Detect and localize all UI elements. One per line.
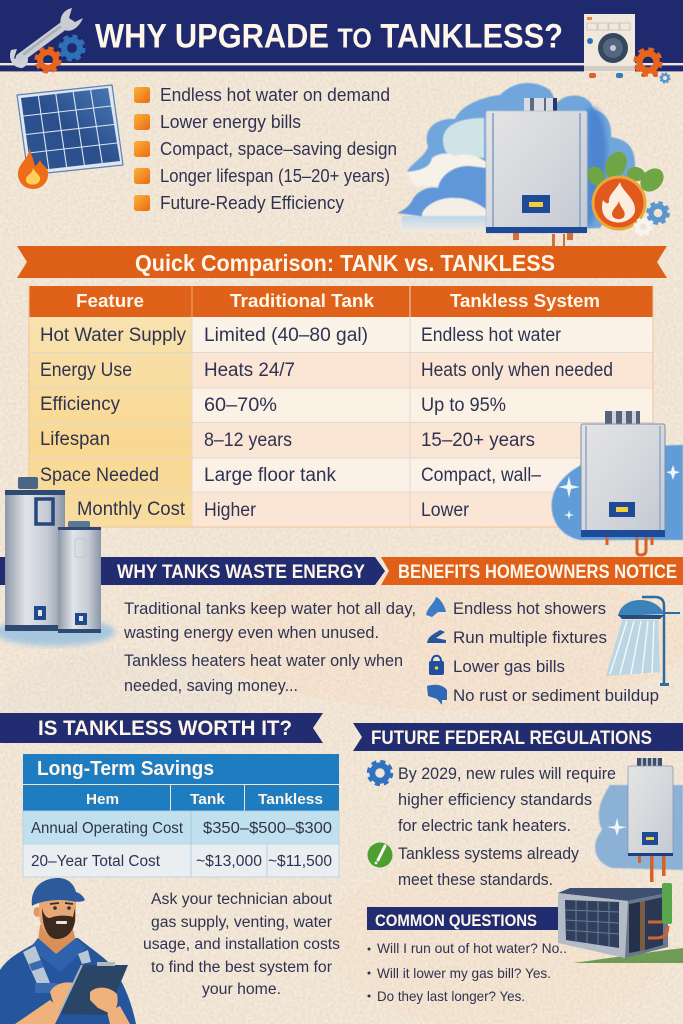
- heater base: [486, 227, 587, 233]
- text block: why tanks waste energy: wasting energy even when unused.: [123, 623, 379, 642]
- copper pipes: [648, 922, 668, 938]
- row: lifespan: 15–20+ years: [421, 430, 535, 451]
- shadow: [0, 618, 115, 646]
- regulation text 1: [398, 765, 616, 835]
- grille: [565, 900, 619, 948]
- row: efficiency: Efficiency: [40, 394, 120, 415]
- savings row: annual operating cost: Annual Operating Cost: [31, 820, 184, 837]
- torso: [0, 938, 136, 1024]
- large tank: [5, 477, 65, 631]
- illustration: traditional tanks: [0, 477, 115, 646]
- bullet 2: Lower energy bills: [160, 111, 301, 132]
- left hand: [50, 982, 76, 1012]
- benefit: fixtures: Run multiple fixtures: [453, 628, 607, 647]
- row: monthly cost: [77, 499, 470, 521]
- heater panel: [522, 195, 550, 213]
- savings table: [23, 754, 339, 877]
- bullet 4: Longer lifespan (15–20+ years): [160, 165, 390, 186]
- ribbon: is tankless worth it: [0, 713, 323, 743]
- row: space needed: Large floor tank: [204, 465, 336, 486]
- bullet 5: Future-Ready Efficiency: [160, 192, 345, 213]
- icon: green check: [368, 842, 392, 868]
- green pipe: [662, 883, 672, 924]
- row: efficiency: [40, 394, 506, 416]
- sparkle: [607, 818, 627, 836]
- regulation text 2: Tankless systems already: [398, 845, 580, 863]
- base: [581, 530, 665, 537]
- cap: [32, 878, 85, 906]
- collar: [30, 938, 86, 972]
- ear: [34, 907, 40, 917]
- control panel: [609, 502, 635, 517]
- regulation text 1: By 2029, new rules will require: [398, 765, 616, 783]
- illustration: tankless heater with clouds and flame badge: [397, 83, 668, 246]
- savings title: [23, 754, 339, 784]
- table header: Tankless System: [450, 290, 600, 311]
- heater edge trim: [493, 113, 580, 227]
- savings row: 20-year total cost: 20–Year Total Cost: [31, 853, 161, 870]
- bullet 3: Compact, space–saving design: [160, 138, 397, 159]
- clipboard: [59, 962, 128, 1015]
- heater body: [486, 111, 587, 233]
- illustration: outdoor condenser unit: [558, 883, 683, 963]
- question 3: Do they last longer? Yes.: [377, 988, 525, 1004]
- bullet 1: Endless hot water on demand: [160, 84, 390, 105]
- bullet list: benefits: [134, 84, 397, 213]
- row: space needed: Space Needed: [40, 465, 159, 486]
- icon: wrench and gears: [10, 8, 84, 72]
- neck: [38, 925, 76, 954]
- savings header row: Tank: [190, 792, 226, 808]
- question 1: Will I run out of hot water? No..: [377, 940, 567, 956]
- text block: why tanks waste energy: Traditional tanks keep water hot all day,: [124, 599, 416, 618]
- right forearm: [107, 1006, 130, 1024]
- banner: common questions: COMMON QUESTIONS: [375, 912, 537, 930]
- savings row: 20-year total cost: ~$11,500: [268, 853, 332, 870]
- row: energy use: [40, 360, 613, 381]
- ground: [573, 948, 683, 963]
- list: common questions: [368, 940, 567, 1004]
- list: benefits homeowners notice: [426, 597, 659, 705]
- flue: [637, 758, 662, 766]
- table header: [29, 286, 653, 317]
- clouds: [397, 83, 635, 232]
- savings row: 20-year total cost: ~$13,000: [196, 853, 262, 870]
- flue: [605, 411, 640, 424]
- ribbon: quick comparison heading: Quick Comparison: TANK vs. TANKLESS: [135, 250, 555, 276]
- pipes: [607, 537, 652, 555]
- text block: why tanks waste energy: [123, 599, 416, 695]
- small gears: [635, 203, 668, 235]
- text block: ask your technician: Ask your technician about: [151, 891, 333, 908]
- row: hot water supply: Endless hot water: [421, 325, 562, 346]
- strap bands: [29, 960, 44, 971]
- row: hot water supply: Limited (40–80 gal): [204, 325, 368, 346]
- small tank: [58, 521, 101, 633]
- side dark panels: [629, 897, 663, 953]
- text block: ask your technician: gas supply, venting, water: [151, 914, 332, 931]
- row: energy use: Heats only when needed: [421, 360, 613, 381]
- sparkles: [558, 465, 680, 520]
- text block: ask your technician: usage, and installation costs: [143, 936, 340, 953]
- row: lifespan: 8–12 years: [204, 430, 292, 451]
- leaves: [584, 148, 668, 196]
- illustration: technician with clipboard: [0, 878, 136, 1024]
- left forearm: [15, 1000, 62, 1024]
- text block: ask your technician: to find the best system for: [151, 959, 332, 976]
- row: energy use: Heats 24/7: [204, 360, 295, 381]
- row: monthly cost: Higher: [204, 500, 257, 521]
- list: regulations: [368, 762, 616, 889]
- benefit: no rust: No rust or sediment buildup: [453, 686, 659, 705]
- ribbon: is tankless worth it: IS TANKLESS WORTH IT?: [38, 716, 292, 740]
- regulation text 2: meet these standards.: [398, 871, 553, 889]
- savings header row: Tankless: [258, 792, 323, 808]
- eyes: [50, 903, 73, 910]
- ribbon: quick comparison heading: [17, 246, 667, 278]
- savings title: Long-Term Savings: [37, 758, 214, 780]
- base: [628, 853, 673, 856]
- header band: [0, 0, 683, 71]
- pocket: [35, 983, 57, 993]
- icon: solar panel with flame: [17, 85, 123, 189]
- mouth: [56, 921, 67, 924]
- benefit: showers: Endless hot showers: [453, 599, 606, 618]
- table cell fills: [29, 286, 653, 527]
- illustration: wall heater and blue backdrop: [595, 758, 683, 882]
- body: [628, 766, 673, 855]
- savings row: annual operating cost: $350–$500–$300: [203, 820, 332, 837]
- regulation text 2: [398, 845, 580, 889]
- benefit: gas bills: Lower gas bills: [453, 657, 565, 676]
- icon: blue gear: [369, 762, 391, 784]
- savings row: annual operating cost: [23, 811, 339, 844]
- panel: [642, 832, 658, 845]
- question 2: Will it lower my gas bill? Yes.: [377, 965, 551, 981]
- backdrop: [595, 785, 683, 870]
- row: monthly cost: Monthly Cost: [77, 499, 186, 520]
- top rim: [558, 888, 668, 901]
- row: space needed: [40, 465, 541, 486]
- savings header row: Hem: [86, 792, 119, 808]
- illustration: tankless heater over table: [552, 411, 683, 555]
- table header: Feature: [76, 290, 144, 311]
- comparison table: [29, 286, 653, 527]
- text block: ask your technician: your home.: [202, 981, 281, 998]
- table header: Traditional Tank: [230, 290, 375, 311]
- row: space needed: Compact, wall–: [421, 465, 541, 486]
- text block: ask your technician: [143, 891, 340, 998]
- row: hot water supply: Hot Water Supply: [40, 325, 186, 346]
- ribbon: future federal regulations: FUTURE FEDERAL REGULATIONS: [371, 728, 652, 749]
- flame badge: [592, 176, 646, 230]
- regulation text 1: higher efficiency standards: [398, 791, 592, 809]
- regulation text 1: for electric tank heaters.: [398, 817, 571, 835]
- title: WHY UPGRADE TO TANKLESS?: [95, 18, 563, 56]
- body: [581, 424, 665, 532]
- icon: heat pump unit with gears: [584, 14, 670, 83]
- row: efficiency: 60–70%: [204, 395, 277, 416]
- savings row: 20-year total cost: [23, 844, 339, 877]
- row: energy use: Energy Use: [40, 360, 132, 381]
- row: hot water supply: [40, 325, 562, 346]
- row: lifespan: [40, 429, 535, 451]
- right hand: [90, 988, 118, 1014]
- trim: [586, 426, 660, 530]
- heater pipes: [513, 233, 573, 246]
- front face: [558, 893, 628, 958]
- heater flue: [524, 98, 557, 111]
- side face: [625, 893, 668, 958]
- banner: why tanks waste energy: WHY TANKS WASTE ENERGY: [117, 562, 365, 583]
- row: lifespan: Lifespan: [40, 429, 110, 450]
- straps: [23, 946, 91, 986]
- head: [39, 895, 76, 938]
- beard: [42, 908, 75, 939]
- blue backdrop: [552, 445, 683, 540]
- text block: why tanks waste energy: needed, saving money...: [124, 676, 298, 695]
- row: efficiency: Up to 95%: [421, 395, 506, 416]
- row: monthly cost: Lower: [421, 500, 470, 521]
- text block: why tanks waste energy: Tankless heaters heat water only when: [124, 651, 403, 670]
- illustration: shower head: [606, 597, 680, 686]
- savings header row: [23, 785, 339, 811]
- pipes: [638, 856, 666, 882]
- banner: why tanks waste energy: [0, 557, 385, 585]
